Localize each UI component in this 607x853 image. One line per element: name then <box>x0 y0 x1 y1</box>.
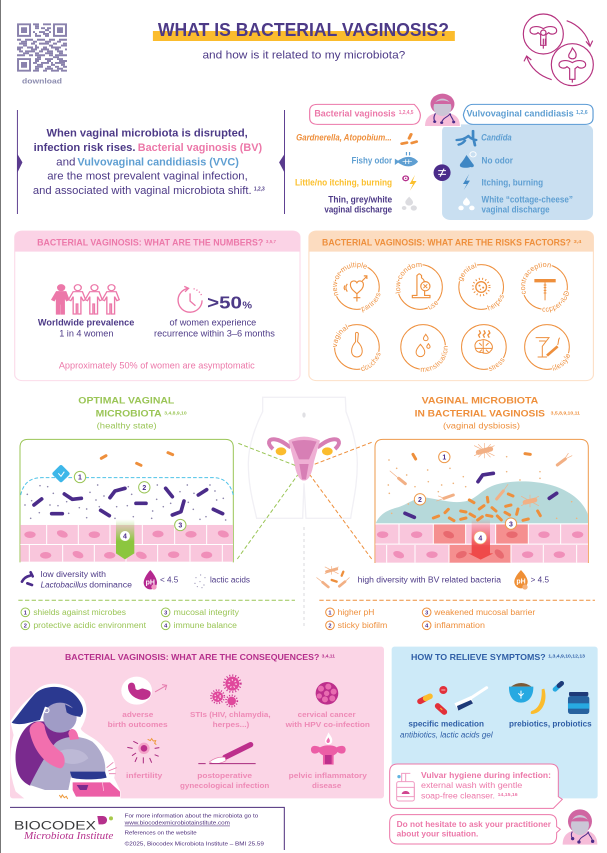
legend optimal: lactic acids <box>210 576 250 585</box>
icon: doctor <box>425 94 460 126</box>
asymptomatic note: Approximately 50% of women are asymptomatic <box>59 361 255 371</box>
key optimal: shields against microbes <box>33 608 126 617</box>
panel: intro statement: Bacterial vaginosis (BV) <box>138 141 262 154</box>
heading dysbiosis: VAGINAL MICROBIOTA <box>422 396 539 406</box>
footer: logo and credits <box>10 807 284 850</box>
credits text: For more information about the microbiota go to <box>125 814 258 820</box>
panel: intro statement: and associated with vaginal microbiota shift. <box>33 184 252 197</box>
consequences heading: 3,4,11 <box>322 653 336 658</box>
key dysbiosis <box>326 608 536 630</box>
consequence: cervical cancer <box>285 682 370 729</box>
consequences heading: BACTERIAL VAGINOSIS: WHAT ARE THE CONSEQUENCES? <box>65 652 319 662</box>
panel: optimal vaginal microbiota: 2 <box>142 485 146 492</box>
panel: intro statement: infection risk rises. <box>34 141 135 154</box>
callout: vulvar hygiene: external wash with gentle <box>421 781 523 790</box>
consequence: STIs: herpes...) <box>213 720 250 729</box>
arrow: inflammation <box>468 518 493 560</box>
key dysbiosis: higher pH <box>338 608 375 617</box>
icon: bolt <box>463 174 470 190</box>
key optimal: 2 <box>24 623 27 629</box>
key optimal: 4 <box>164 623 168 629</box>
risk: genital herpes <box>458 262 504 310</box>
icon: prebiotics and probiotics <box>509 683 592 729</box>
BV symptom: odor <box>351 152 418 166</box>
consequence: birth outcomes: birth outcomes <box>108 720 168 729</box>
consequence: pelvic inflammatory disease <box>289 732 368 790</box>
arrow: immune balance <box>116 519 134 559</box>
icon: not equal <box>434 164 451 181</box>
consequence: postoperative infection <box>180 745 270 790</box>
VVC bubble: Vulvovaginal candidiasis <box>466 109 574 119</box>
BV related bacteria <box>390 443 572 507</box>
icon: uterus cycle <box>523 14 593 86</box>
VVC bubble: 1,2,6 <box>576 110 588 116</box>
logo <box>14 816 114 842</box>
medication text: antibiotics, lactic acids gel <box>400 731 493 740</box>
logo: BIOCODEX <box>14 818 96 832</box>
risk: douches: vaginal <box>333 324 348 348</box>
panel: BV numbers: 1 in 4 women <box>59 329 113 339</box>
risk: condom <box>396 263 443 310</box>
consequence: birth outcomes <box>108 677 168 729</box>
heading dysbiosis: IN BACTERIAL VAGINOSIS <box>415 409 545 419</box>
acid particles <box>388 457 577 518</box>
panel: intro statement: Vulvovaginal candidiasis (VVC) <box>77 155 239 168</box>
BV symptom: odor: Fishy odor <box>351 156 392 166</box>
dysbiosis box <box>375 439 588 563</box>
key dysbiosis: 1 <box>328 610 332 616</box>
panel: BV numbers <box>15 231 300 381</box>
heading optimal <box>78 396 187 431</box>
risk: condom: low condom <box>396 263 423 294</box>
panel: optimal vaginal microbiota: 3 <box>178 523 182 530</box>
recurrence text: of women experience <box>170 318 257 328</box>
risk: douches <box>333 324 380 371</box>
risk: copper IUD: copper IUD <box>541 290 569 313</box>
callout: vulvar hygiene: 14,15,16 <box>498 792 518 797</box>
key optimal: 3 <box>164 610 167 616</box>
heading optimal: 3,4,8,9,10 <box>164 410 187 415</box>
risk: partners: partners <box>360 292 380 313</box>
arrow: immune balance: 4 <box>123 534 127 541</box>
panel: microbiota in bacterial vaginosis: 1 <box>442 455 446 462</box>
icon: four women <box>52 285 119 314</box>
tissue <box>20 525 233 562</box>
lactic acid dots <box>25 485 226 520</box>
risk: genital herpes: herpes <box>487 294 504 310</box>
panel: BV numbers: 3,5,7 <box>266 239 276 245</box>
panel: vulvovaginal candidiasis column: Itching, burning <box>482 178 543 188</box>
key dysbiosis: inflammation <box>434 621 485 630</box>
key optimal: immune balance <box>174 621 238 630</box>
legend optimal: low diversity with <box>41 570 106 579</box>
callout: ask your practitioner: about your situation. <box>397 830 478 839</box>
consequence: cervical cancer: cervical cancer <box>298 710 356 719</box>
risk: copper IUD: contraception <box>521 262 552 296</box>
risk: partners <box>332 262 380 313</box>
legend optimal: < 4.5 <box>160 576 179 585</box>
callout: ask your practitioner <box>390 815 560 844</box>
BV symptom: discharge: vaginal discharge <box>324 205 393 215</box>
consequence: pelvic inflammatory disease: disease <box>312 781 341 790</box>
microbiota box <box>20 439 233 562</box>
panel: vulvovaginal candidiasis column: White “cottage-cheese” <box>482 195 573 205</box>
consequence: STIs <box>190 675 271 729</box>
key optimal <box>21 608 239 630</box>
header and introduction section <box>17 20 593 220</box>
panel: vulvovaginal candidiasis column: No odor <box>482 156 513 166</box>
heading dysbiosis: 3,5,8,9,10,11 <box>551 410 580 415</box>
panel: relieve symptoms <box>390 647 598 845</box>
BV symptom: discharge: Thin, grey/white <box>328 195 393 205</box>
icon: nose <box>460 152 476 168</box>
consequence: infertility: infertility <box>126 771 163 780</box>
consequence: infertility <box>126 739 163 780</box>
heading optimal: (healthy state) <box>97 421 157 431</box>
arrow: inflammation: 4 <box>478 535 482 542</box>
icon: clock <box>178 286 202 312</box>
legend optimal: Lactobacillus <box>41 581 87 590</box>
panel: optimal vaginal microbiota <box>18 396 298 630</box>
lactobacilli <box>34 488 223 516</box>
medication text <box>400 720 493 740</box>
markers 1 to 3 <box>74 471 186 531</box>
panel: BV risk factors <box>308 230 594 382</box>
panel: BV risk factors: 3,4 <box>574 239 582 245</box>
central body illustration <box>248 397 357 518</box>
icon: pills and applicator <box>420 686 487 712</box>
credits text: www.biocodexmicrobiotainstitute.com <box>124 821 230 827</box>
panel: microbiota in bacterial vaginosis <box>310 396 595 630</box>
credits text: ©2025, Biocodex Microbiota Institute – BMI 25.59 <box>125 841 264 848</box>
shield line <box>21 478 233 495</box>
relieve heading: 1,3,4,9,10,12,13 <box>548 653 586 658</box>
heading optimal: OPTIMAL VAGINAL <box>78 396 175 406</box>
legend dysbiosis: high diversity with BV related bacteria <box>358 576 502 585</box>
risk: copper IUD <box>521 262 569 313</box>
QR code <box>17 23 67 72</box>
relieve heading: HOW TO RELIEVE SYMPTOMS? <box>411 652 546 662</box>
medication text: specific medication <box>408 720 484 729</box>
stat 50 percent: >50 <box>207 293 242 313</box>
panel: vulvovaginal candidiasis column: Candida <box>481 133 512 143</box>
icon: candida <box>457 131 476 145</box>
consequence: postoperative infection: gynecological infection <box>180 781 270 790</box>
BV symptom: bacteria: Gardnerella, Atopobium... <box>296 133 392 143</box>
risk: genital herpes: genital <box>458 262 477 282</box>
risk: stress: stress <box>488 358 504 371</box>
tissue inflamed <box>375 524 588 563</box>
BV symptom: itching <box>295 175 417 191</box>
risk: stress <box>461 324 507 371</box>
panel: vulvovaginal candidiasis column <box>442 104 593 220</box>
panel: intro statement: and <box>56 155 76 168</box>
heading dysbiosis: (vaginal dysbiosis) <box>443 421 520 431</box>
risk: condom: use <box>428 300 438 310</box>
callout: vulvar hygiene <box>390 764 562 808</box>
callout: vulvar hygiene: Vulvar hygiene during infection: <box>421 771 551 780</box>
key dysbiosis: 2 <box>328 623 332 629</box>
legend optimal <box>22 570 250 590</box>
risk: douches: douches <box>360 352 380 371</box>
callout: ask your practitioner: Do not hesitate to ask your practitioner <box>397 820 551 829</box>
key optimal: 1 <box>24 610 27 616</box>
BV bubble: Bacterial vaginosis <box>314 109 396 119</box>
shield icon <box>52 464 70 483</box>
prevalence text: Worldwide prevalence <box>38 318 135 328</box>
woman illustration <box>12 686 120 799</box>
panel: intro statement: 1,2,3 <box>254 187 265 192</box>
BV symptom: discharge <box>324 195 417 215</box>
risk: lifestyle <box>524 324 570 371</box>
legend dysbiosis: pH <box>516 579 526 586</box>
panel: intro statement: are the most prevalent vaginal infection, <box>47 169 248 182</box>
consequence: STIs: STIs (HIV, chlamydia, <box>190 710 271 719</box>
legend dysbiosis <box>317 566 550 590</box>
markers dysbiosis <box>414 451 517 529</box>
key dysbiosis: sticky biofilm <box>338 621 388 630</box>
key dysbiosis: weakened mucosal barrier <box>433 608 536 617</box>
panel: microbiota in bacterial vaginosis: 3 <box>509 521 513 528</box>
key optimal: mucosal integrity <box>174 608 239 617</box>
BV bubble: 1,2,4,5 <box>399 110 413 116</box>
heading optimal: MICROBIOTA <box>96 409 162 419</box>
download label: download <box>22 77 62 85</box>
subtitle: and how is it related to my microbiota? <box>202 49 405 61</box>
legend dysbiosis: > 4.5 <box>531 576 550 585</box>
numbers heading: BACTERIAL VAGINOSIS: WHAT ARE THE NUMBERS? <box>37 238 263 248</box>
consequence: birth outcomes: adverse <box>122 710 153 719</box>
logo: Microbiota Institute <box>23 831 114 842</box>
icon: white drops <box>458 197 475 210</box>
panel: microbiota in bacterial vaginosis: 2 <box>418 497 422 504</box>
consequence: postoperative infection: postoperative <box>197 771 252 780</box>
icon: practitioner <box>563 809 597 845</box>
callout: vulvar hygiene: soap-free cleanser. <box>421 792 495 801</box>
risk: lifestyle: lifestyle <box>552 353 570 371</box>
title: WHAT IS BACTERIAL VAGINOSIS? <box>158 20 449 41</box>
pathogens <box>101 453 173 465</box>
numbers and risks section <box>14 230 594 382</box>
key dysbiosis: 3 <box>425 610 428 616</box>
purple bacteria <box>405 473 557 517</box>
VVC bubble <box>463 104 593 124</box>
panel: intro statement <box>17 110 285 214</box>
legend optimal: dominance <box>89 581 133 590</box>
panel: BV numbers: recurrence within 3–6 months <box>154 329 275 339</box>
consequence: pelvic inflammatory disease: pelvic inflammatory <box>289 771 368 780</box>
stat 50 percent: % <box>242 300 252 311</box>
panel: optimal vaginal microbiota: 1 <box>78 475 82 482</box>
credits text: References on the website <box>125 831 197 837</box>
consequence: cervical cancer: with HPV co-infection <box>285 720 370 729</box>
risk: partners: new or multiple <box>332 262 368 296</box>
key optimal: protective acidic environment <box>33 621 147 630</box>
icon: prebiotics and probiotics: prebiotics, probiotics <box>509 720 592 729</box>
panel: intro statement: When vaginal microbiota is disrupted, <box>46 127 248 139</box>
risk: menstruation <box>400 324 448 372</box>
legend optimal: pH <box>146 579 155 586</box>
BV symptom: itching: Little/no itching, burning <box>295 178 392 188</box>
risk: menstruation: menstruation <box>420 345 448 372</box>
key dysbiosis: 4 <box>425 623 429 629</box>
BV bubble <box>310 104 420 124</box>
biofilm <box>376 481 588 523</box>
orange bacteria cluster <box>413 454 540 521</box>
credits text <box>124 814 264 848</box>
panel: vulvovaginal candidiasis column: vaginal discharge <box>482 205 550 215</box>
heading dysbiosis <box>415 396 580 431</box>
panel: consequences <box>10 647 384 798</box>
